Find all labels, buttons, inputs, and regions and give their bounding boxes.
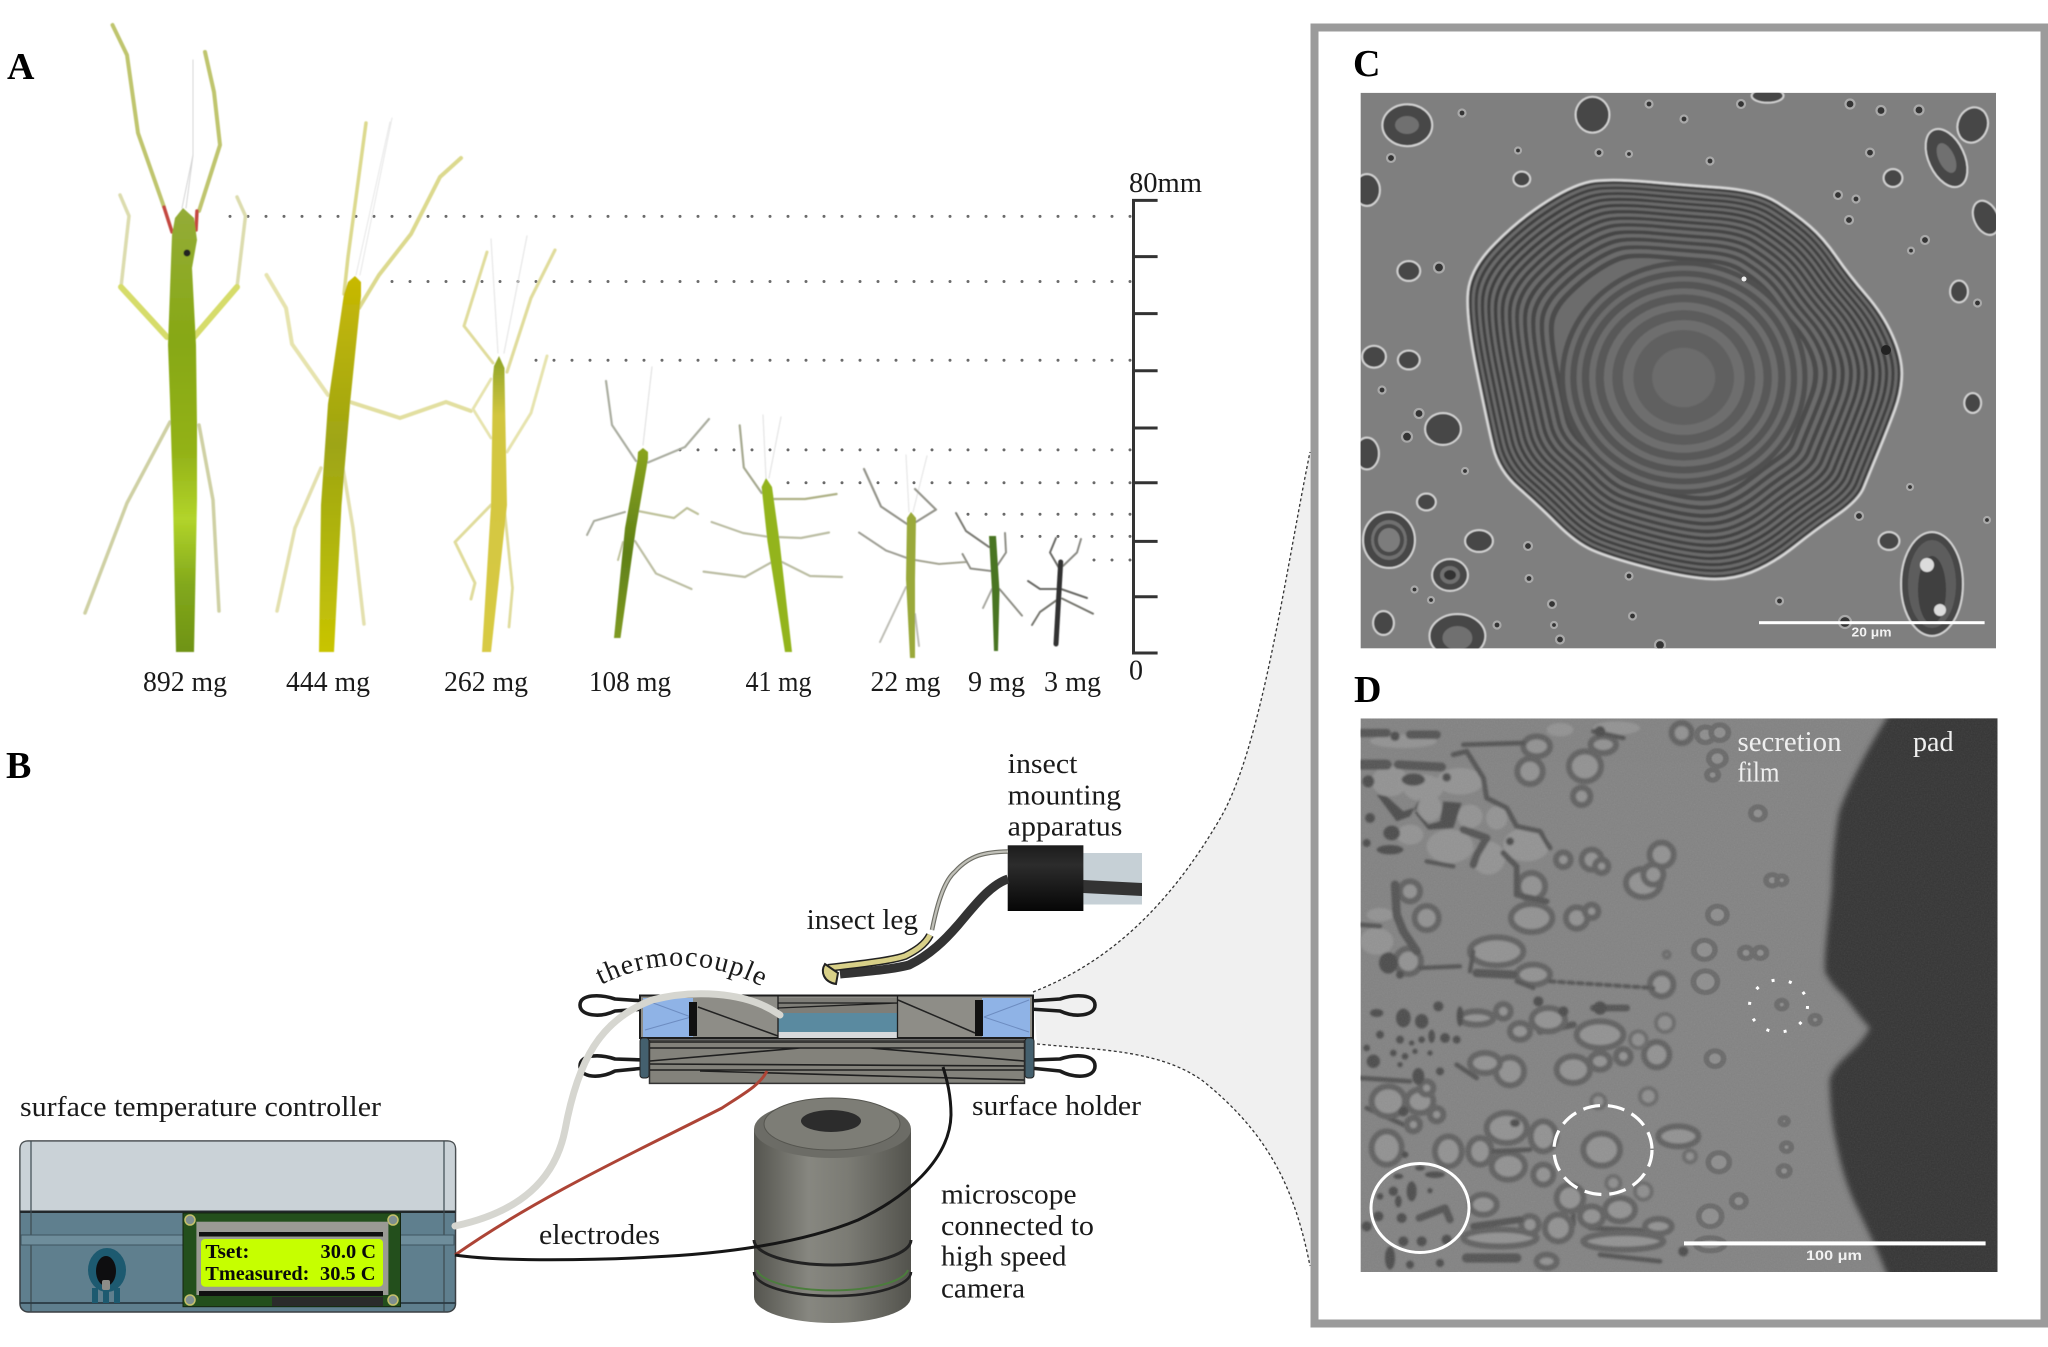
label: microscope connected to high speed camera: microscope bbox=[941, 1179, 1076, 1210]
panel C: microscope image of secretion droplet bbox=[1353, 43, 2004, 658]
small particles bbox=[1378, 100, 1990, 650]
insect 108 mg bbox=[587, 367, 709, 638]
dashed circle marker bbox=[1554, 1106, 1652, 1194]
panel D: secretion film and pad bbox=[1354, 669, 2005, 1280]
label: secretion film bbox=[1738, 732, 1842, 782]
solid circle marker bbox=[1371, 1164, 1469, 1252]
body mass labels: 22 mg bbox=[870, 667, 940, 698]
label: thermocouple: thermocouple bbox=[596, 952, 765, 986]
interference image bbox=[1354, 89, 2004, 658]
label: surface temperature controller: surface temperature controller bbox=[20, 1092, 382, 1123]
faint droplets near the pad bbox=[1694, 725, 1820, 1251]
label: microscope connected to high speed camera bbox=[941, 1179, 1094, 1304]
length scale bar 0 to 80 mm: 80mm bbox=[1129, 168, 1202, 199]
adhesive pad bbox=[1825, 710, 2005, 1280]
insect 41 mg bbox=[704, 415, 842, 652]
LCD module: Tmeasured: bbox=[205, 1263, 309, 1285]
knob bbox=[88, 1248, 126, 1303]
body mass labels: 108 mg bbox=[589, 667, 671, 698]
image grain bbox=[1361, 718, 1998, 1272]
LCD module: 30.0 C bbox=[320, 1241, 376, 1263]
LCD module: 30.5 C bbox=[320, 1263, 376, 1285]
label: insect mounting apparatus: apparatus bbox=[1008, 812, 1122, 843]
body mass labels: 9 mg bbox=[968, 667, 1025, 698]
panel A: stick insects by body mass bbox=[7, 25, 1202, 698]
heading D: D bbox=[1354, 669, 1381, 711]
microscope objective bbox=[754, 1098, 911, 1323]
insect mounting apparatus bbox=[1008, 845, 1142, 911]
scale bar 20 µm: 20 μm bbox=[1852, 625, 1892, 640]
temperature controller box bbox=[20, 1141, 456, 1312]
zoom wedge from surface holder to microscope panels bbox=[1033, 452, 1310, 1266]
panel B: experimental setup bbox=[6, 745, 1142, 1323]
label: electrodes: electrodes bbox=[539, 1220, 660, 1251]
dewetting pattern, upper half bbox=[1360, 721, 1703, 996]
frame around panels C and D bbox=[1314, 28, 2044, 1324]
microscope image bbox=[1360, 710, 2005, 1280]
insect 3 mg bbox=[1028, 538, 1093, 644]
heading C: C bbox=[1353, 43, 1380, 85]
insect leg bbox=[823, 852, 1008, 984]
heading A: A bbox=[7, 46, 35, 88]
length scale bar 0 to 80 mm: 0 bbox=[1129, 656, 1143, 686]
body mass labels: 262 mg bbox=[444, 667, 528, 698]
label: microscope connected to high speed camera: connected to bbox=[941, 1211, 1094, 1242]
scale bar 100 µm bbox=[1684, 1241, 1986, 1263]
dotted length guide lines bbox=[212, 216, 1130, 560]
LCD module bbox=[183, 1213, 400, 1307]
heading B: B bbox=[6, 745, 31, 787]
insect 9 mg bbox=[956, 513, 1022, 651]
LCD module: Tset: bbox=[205, 1241, 249, 1263]
thermocouple cable bbox=[455, 994, 780, 1226]
body mass labels: 3 mg bbox=[1044, 667, 1101, 698]
dewetting pattern, lower half bbox=[1360, 996, 1698, 1270]
label: secretion film: film bbox=[1738, 757, 1780, 788]
label: secretion film: secretion bbox=[1738, 727, 1842, 758]
label: insect mounting apparatus: mounting bbox=[1008, 781, 1121, 812]
red electrode wire bbox=[455, 1071, 767, 1255]
black electrode wire bbox=[455, 1067, 951, 1260]
dotted circle marker bbox=[1750, 980, 1808, 1032]
length scale bar 0 to 80 mm bbox=[1129, 168, 1202, 686]
insect 444 mg bbox=[266, 118, 471, 652]
label: microscope connected to high speed camera: camera bbox=[941, 1274, 1026, 1304]
clips bbox=[580, 996, 1095, 1076]
insect 892 mg bbox=[85, 25, 246, 652]
label: insect leg: insect leg bbox=[807, 905, 918, 936]
body mass labels bbox=[143, 667, 1101, 698]
secretion film with interference fringes bbox=[1469, 181, 1901, 578]
label: insect mounting apparatus: insect bbox=[1008, 749, 1078, 780]
label: insect mounting apparatus bbox=[1008, 749, 1122, 843]
scale bar 100 µm: 100 μm bbox=[1806, 1247, 1862, 1263]
insect 22 mg bbox=[859, 455, 966, 658]
insect 262 mg bbox=[455, 236, 555, 652]
label: pad: pad bbox=[1913, 727, 1954, 758]
body mass labels: 892 mg bbox=[143, 667, 227, 698]
body mass labels: 41 mg bbox=[746, 667, 812, 698]
scale bar 20 µm bbox=[1759, 621, 1985, 640]
body mass labels: 444 mg bbox=[286, 667, 370, 698]
surface holder bbox=[580, 996, 1095, 1083]
droplets around film bbox=[1354, 89, 2004, 658]
label: surface holder: surface holder bbox=[972, 1091, 1142, 1122]
label: microscope connected to high speed camera: high speed bbox=[941, 1242, 1066, 1273]
